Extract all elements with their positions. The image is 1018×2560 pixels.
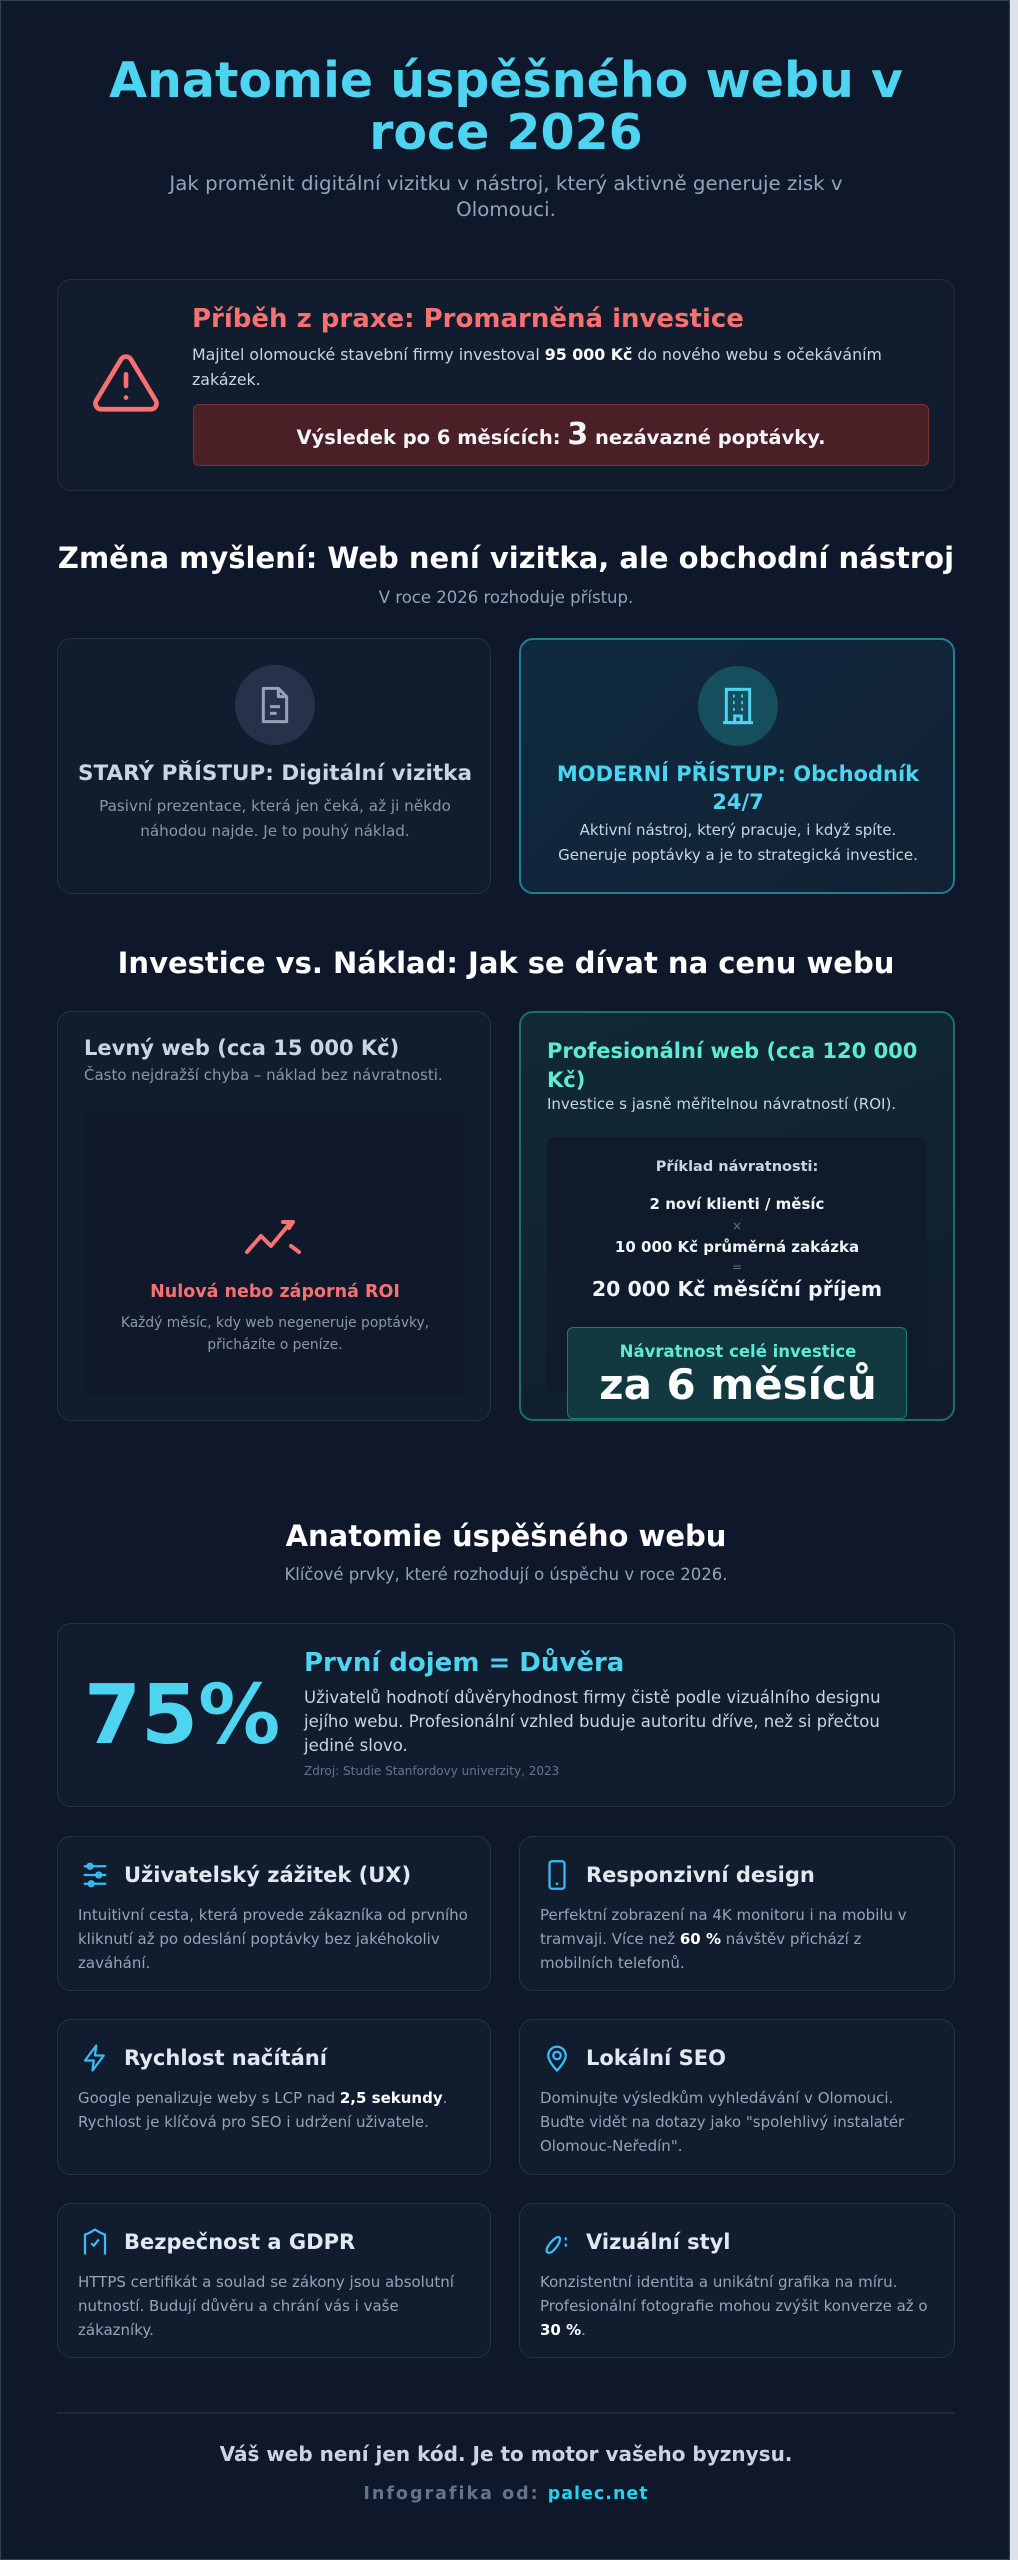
panel: UX	[57, 1836, 491, 1991]
icon: phone	[548, 1860, 566, 1890]
modern approach text: Aktivní nástroj, který pracuje, i když spíte.	[580, 821, 896, 839]
pro subtitle: Investice s jasně měřitelnou návratností (ROI).	[547, 1095, 896, 1113]
first impression title: První dojem = Důvěra	[304, 1648, 624, 1678]
panel: modern approach	[519, 638, 955, 894]
panel: local seo	[519, 2019, 955, 2175]
panel: security: HTTPS certifikát a soulad se zákony jsou absolutní nutností. Budují důvěru a chrání vás i vaše zákazníky.	[78, 2273, 454, 2339]
roi example box: ×	[732, 1219, 742, 1233]
subheading: anatomy: Klíčové prvky, které rozhodují o úspěchu v roce 2026.	[284, 1565, 728, 1584]
icon: sliders	[84, 1862, 106, 1888]
panel: local seo: Lokální SEO	[586, 2046, 726, 2070]
heading: mindset: Změna myšlení: Web není vizitka, ale obchodní nástroj	[58, 541, 954, 575]
panel: first impression	[57, 1623, 955, 1807]
payback callout: Návratnost celé investice	[620, 1342, 856, 1361]
icon: bolt	[84, 2044, 105, 2072]
panel: professional web	[519, 1011, 955, 1421]
cheap subtitle: Často nejdražší chyba – náklad bez návratnosti.	[84, 1066, 443, 1084]
panel: responsive: Responzivní design	[586, 1863, 815, 1887]
zero roi text: Každý měsíc, kdy web negeneruje poptávky, přicházíte o peníze.	[121, 1315, 429, 1353]
footer tagline: Váš web není jen kód. Je to motor vašeho byznysu.	[220, 2442, 792, 2466]
panel: responsive	[519, 1836, 955, 1991]
panel: speed: Rychlost načítání	[124, 2046, 327, 2070]
modern approach title: MODERNÍ PŘÍSTUP: Obchodník 24/7	[557, 762, 919, 814]
story text: Majitel olomoucké stavební firmy investoval 95 000 Kč do nového webu s očekáváním zakázek.	[192, 345, 882, 389]
icon: building	[698, 666, 778, 746]
icon: shield	[84, 2228, 106, 2254]
panel: security: Bezpečnost a GDPR	[124, 2230, 355, 2254]
zero roi label: Nulová nebo záporná ROI	[150, 1282, 400, 1302]
roi example box: =	[732, 1260, 742, 1274]
panel: speed: Google penalizuje weby s LCP nad 2,5 sekundy. Rychlost je klíčová pro SEO i udržení uživatele.	[78, 2089, 447, 2131]
panel: speed	[57, 2019, 491, 2175]
payback callout: za 6 měsíců	[599, 1360, 877, 1409]
panel: security	[57, 2203, 491, 2358]
roi example box: 2 noví klienti / měsíc	[650, 1195, 824, 1213]
icon: trend down	[245, 1220, 302, 1254]
source: Zdroj: Studie Stanfordovy univerzity, 2023	[304, 1764, 559, 1778]
modern approach text: Generuje poptávky a je to strategická investice.	[558, 846, 918, 864]
roi example box: Příklad návratnosti:	[656, 1159, 818, 1175]
roi example box	[547, 1137, 927, 1393]
panel: local seo: Dominujte výsledkům vyhledávání v Olomouci. Buďte vidět na dotazy jako "spolehlivý instalatér Olomouc-Neředín".	[540, 2089, 904, 2155]
subheading: mindset: V roce 2026 rozhoduje přístup.	[379, 588, 633, 607]
heading: investment: Investice vs. Náklad: Jak se dívat na cenu webu	[118, 946, 894, 980]
panel: visual style	[519, 2203, 955, 2358]
footer credit: Infografika od: palec.net	[363, 2484, 649, 2504]
roi example box: 10 000 Kč průměrná zakázka	[615, 1238, 859, 1256]
title	[109, 52, 903, 161]
inner box: zero roi	[85, 1112, 465, 1396]
modern approach text	[558, 821, 918, 864]
panel: cheap web	[57, 1011, 491, 1421]
icon: pin	[547, 2046, 567, 2072]
icon: document	[235, 665, 315, 745]
first impression text: Uživatelů hodnotí důvěryhodnost firmy čistě podle vizuálního designu jejího webu. Profesionální vzhled buduje autoritu dříve, než si přečtou jediné slovo.	[304, 1688, 881, 1755]
panel: old approach	[57, 638, 491, 894]
result box	[193, 404, 929, 466]
icon: brush	[545, 2236, 567, 2254]
result box: Výsledek po 6 měsících: 3 nezávazné poptávky.	[296, 417, 826, 452]
old approach text: Pasivní prezentace, která jen čeká, až ji někdo náhodou najde. Je to pouhý náklad.	[99, 797, 451, 840]
payback callout	[567, 1327, 907, 1419]
story heading: Příběh z praxe: Promarněná investice	[192, 304, 744, 334]
old approach title: STARÝ PŘÍSTUP: Digitální vizitka	[78, 761, 472, 786]
pro title: Profesionální web (cca 120 000 Kč)	[547, 1039, 917, 1092]
panel: story	[57, 279, 955, 491]
title: roce 2026	[369, 104, 643, 161]
panel: visual style: Vizuální styl	[586, 2230, 731, 2254]
panel: visual style: Konzistentní identita a unikátní grafika na míru. Profesionální fotografie mohou zvýšit konverze až o 30 %.	[540, 2273, 928, 2339]
panel: responsive: Perfektní zobrazení na 4K monitoru i na mobilu v tramvaji. Více než 60 % návštěv přichází z mobilních telefonů.	[540, 1906, 907, 1972]
title: Anatomie úspěšného webu v	[109, 52, 903, 109]
panel: UX: Uživatelský zážitek (UX)	[124, 1863, 411, 1887]
roi example box: 20 000 Kč měsíční příjem	[592, 1277, 882, 1301]
stat 75%: 75%	[84, 1668, 280, 1763]
panel: UX: Intuitivní cesta, která provede zákazníka od prvního kliknutí až po odeslání poptávky bez jakéhokoliv zaváhání.	[78, 1906, 468, 1972]
heading: anatomy: Anatomie úspěšného webu	[286, 1519, 726, 1553]
cheap title: Levný web (cca 15 000 Kč)	[84, 1036, 399, 1060]
icon: warning	[93, 354, 159, 412]
subtitle: Jak proměnit digitální vizitku v nástroj, který aktivně generuje zisk v Olomouci.	[169, 172, 843, 221]
